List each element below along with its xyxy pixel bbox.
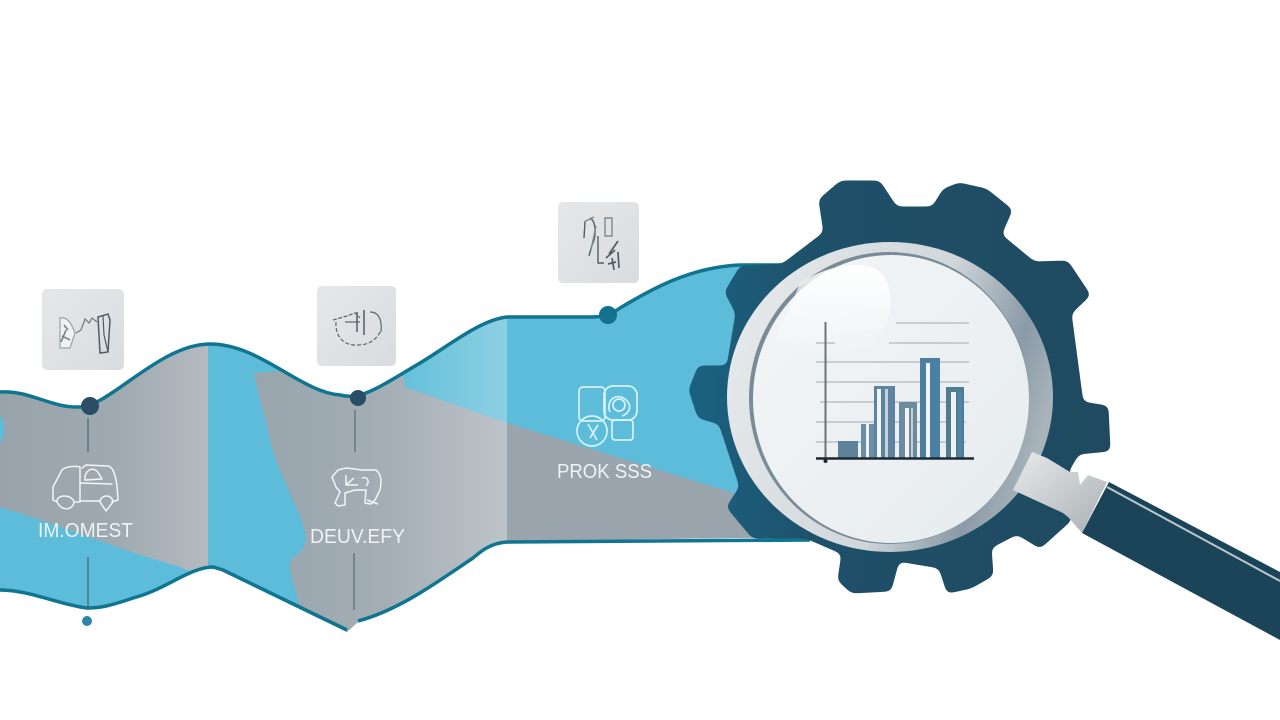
bar 4 [899,402,917,458]
connector line 1 [87,418,89,610]
card background [42,289,124,370]
handle highlight [1107,487,1280,581]
icon card 2 [317,286,396,366]
bar 5 [920,358,940,458]
label: delivery: DEUV.EFY [310,526,405,548]
node 2 [350,390,366,406]
magnifying glass [727,242,1280,640]
handle collar [1013,452,1107,533]
label: process: PROK SSS [557,461,652,483]
icon: delivery scribble [332,468,381,506]
ribbon shaded segments [0,310,760,640]
icon: truck [53,465,118,511]
bar chart [816,322,974,463]
ribbon blue base [0,265,810,632]
card background [317,286,396,366]
icon: process blocks [577,386,637,446]
label: incoming: IM.OMEST [38,520,133,542]
axis origin [824,459,828,463]
step: process [557,386,652,483]
connector line 2 [354,410,355,610]
lens shine [775,265,890,358]
icon: gear [690,182,1109,592]
panel: flowing process ribbon [0,265,810,640]
lens ring [727,242,1053,552]
handle grip [1082,482,1280,640]
node bottom [82,616,92,626]
ribbon top edge [0,265,790,407]
bar 6 [946,387,964,458]
card icon [584,217,619,270]
step: delivery [310,468,405,548]
lens glass [753,255,1029,543]
connector lines and nodes [81,306,617,626]
node 1 [81,397,99,415]
card icon [333,310,381,345]
bar 1 [838,441,858,458]
ribbon bottom edge right [358,540,810,621]
icon card 1 [42,289,124,370]
x axis [816,457,974,460]
icon card 3 [558,202,639,283]
node 3 [599,306,617,324]
step: incoming [38,465,133,542]
bar 2 [861,424,875,458]
card background [558,202,639,283]
y axis [824,322,826,463]
chart gridlines [816,323,969,442]
ribbon bottom edge [0,567,347,630]
card icon [60,314,110,353]
lens dark inner rim [749,252,1029,544]
bar 3 [874,386,895,458]
